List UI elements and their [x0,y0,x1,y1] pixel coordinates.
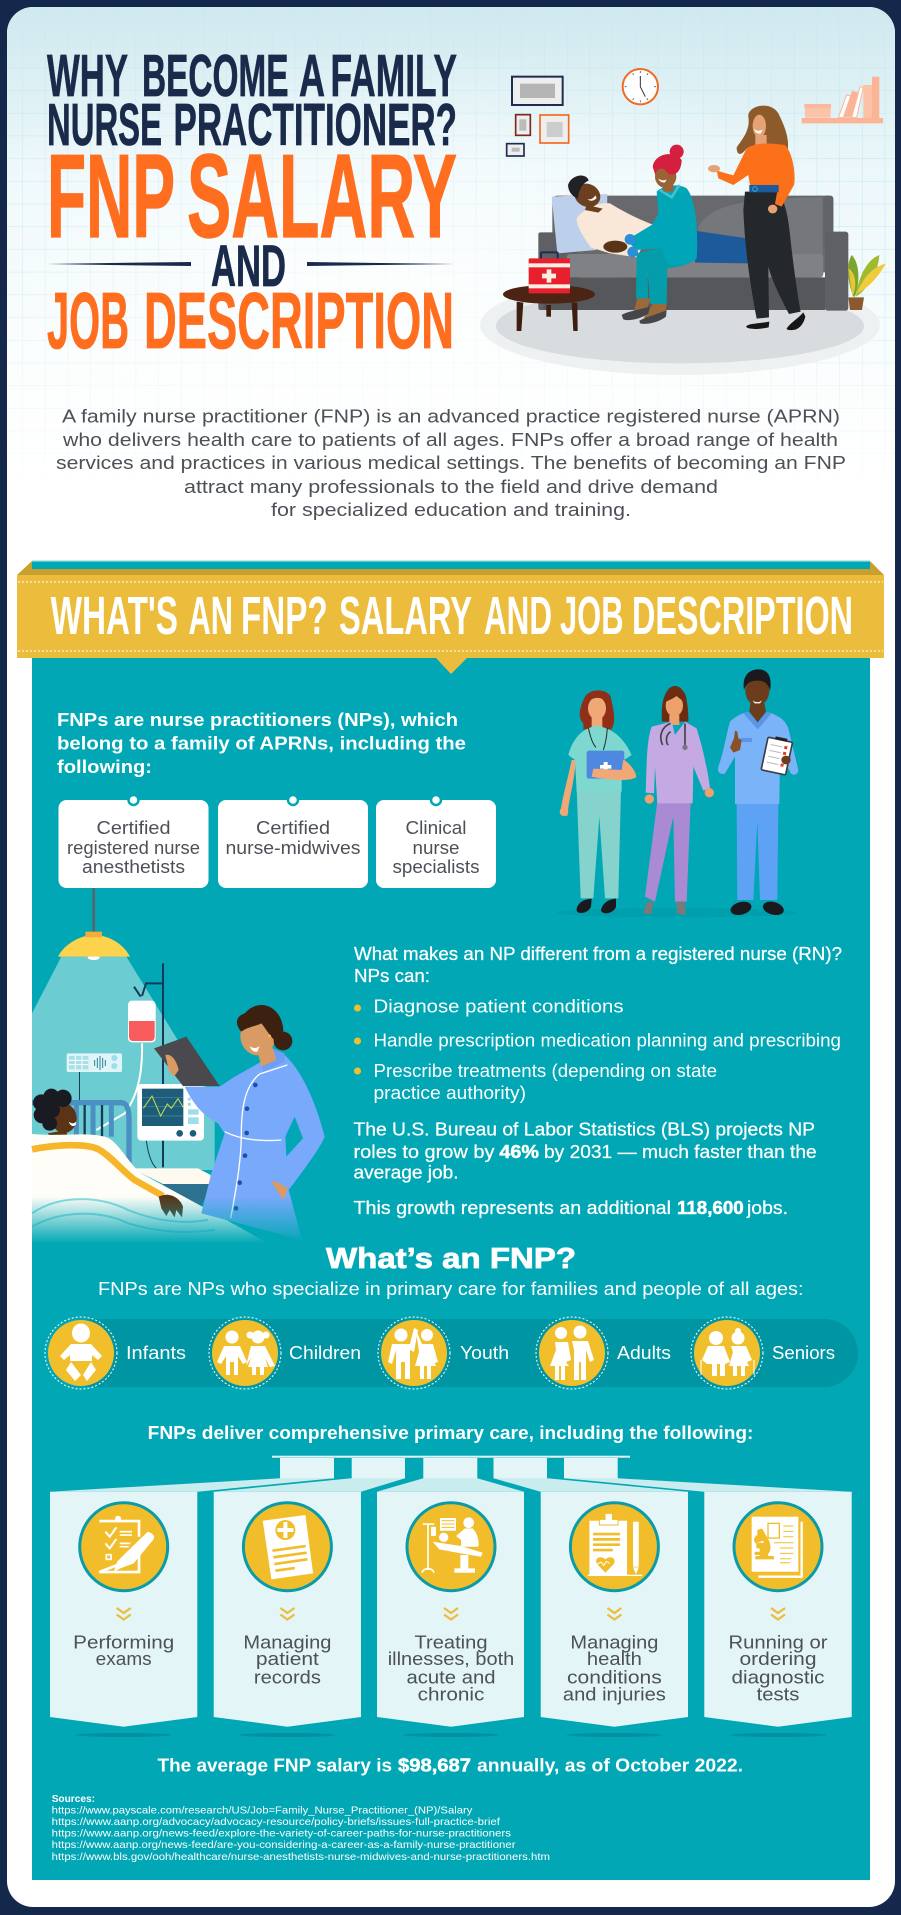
intro paragraph [56,406,846,520]
icon: chevrons [771,1608,785,1620]
bullet list: Diagnose patient conditions [374,996,624,1016]
card: managing health conditions: conditions [567,1666,662,1687]
card: clinical specialists: nurse [412,838,460,858]
salary statement [158,1756,743,1776]
age group: children [209,1317,361,1389]
APRN intro text: belong to a family of APRNs, including the [57,734,466,754]
banner heading [17,561,884,674]
age group: youth: Youth [460,1343,509,1363]
patient in bed [32,1089,268,1260]
IV stand and bag [96,963,164,1167]
card: clinical specialists: Clinical [406,818,466,838]
banner heading: SALARY [339,586,472,646]
floor rug [480,275,880,375]
card: nurse-midwives: nurse-midwives [226,838,360,858]
icon: patient treatment [407,1503,495,1591]
illustration: three nurses [557,669,798,917]
sources: https://www.aanp.org/news-feed/are-you-considering-a-career-as-a-family-nurse-practitioner [52,1839,516,1851]
card: nurse anesthetists: registered nurse [67,838,200,858]
pillow [552,194,607,253]
growth statistics: 46% [499,1142,539,1162]
card: performing exams [50,1492,197,1737]
title: NURSE [47,92,162,158]
sources: Sources: [52,1793,95,1805]
age group: youth [378,1317,509,1389]
card: running diagnostic tests [704,1492,852,1737]
icon: clipboard and pen [80,1503,168,1591]
card: running diagnostic tests: Running or [728,1631,828,1652]
light beam [32,957,215,1170]
heading: What's an FNP? [98,1243,804,1299]
card: running diagnostic tests: tests [757,1684,799,1705]
card: performing exams: exams [96,1648,152,1669]
card: nurse anesthetists: Certified [96,818,170,838]
heading: What's an FNP?: FNPs are NPs who specialize in primary care for families and people of all ages: [98,1279,804,1299]
nurse seated [622,145,697,324]
growth statistics: roles to grow by [354,1142,494,1162]
banner heading: AND [484,586,552,646]
question [354,944,842,986]
age group: adults: Adults [617,1343,671,1363]
growth statistics: 118,600 [677,1198,744,1218]
nurse with tablet [154,1005,325,1240]
bullet list [354,996,841,1103]
icon: chevrons [117,1608,131,1620]
potted plant [848,255,886,310]
age group: adults [536,1317,671,1389]
bottom fade [32,1197,312,1243]
title: PRACTITIONER? [174,92,457,158]
card: managing health conditions: and injuries [563,1684,666,1705]
banner heading: WHAT'S [51,586,178,646]
sofa [538,196,848,311]
question: What makes an NP different from a registered nurse (RN)? [354,944,842,964]
wall frames [507,77,569,156]
nurse in lavender scrubs [643,686,714,915]
APRN type cards [58,795,496,888]
card: managing patient records [214,1492,361,1737]
title: FAMILY [330,43,457,109]
bedside table [131,1168,211,1207]
card: clinical specialists [376,795,496,888]
age group: infants [45,1317,186,1389]
card: running diagnostic tests: diagnostic [732,1666,824,1687]
primary care heading: FNPs deliver comprehensive primary care, including the following: [148,1423,753,1443]
growth statistics: by 2031 — much faster than the [544,1142,817,1162]
header background with grid [7,7,895,500]
growth statistics: average job. [354,1163,458,1183]
intro paragraph: for specialized education and training. [271,499,631,520]
icon: chevrons [444,1608,458,1620]
growth statistics [354,1120,817,1218]
ceiling lamp [58,888,130,960]
bookshelf [802,77,883,123]
card: managing health conditions: health [587,1648,642,1669]
RN comparison text [354,944,842,1218]
first aid kit [529,252,570,293]
card: clinical specialists: specialists [392,857,480,877]
intro paragraph: A family nurse practitioner (FNP) is an advanced practice registered nurse (APRN) [62,406,840,426]
card: performing exams: Performing [73,1631,174,1652]
age group: seniors: Seniors [772,1343,835,1363]
coffee table [503,285,595,331]
growth statistics: The U.S. Bureau of Labor Statistics (BLS) projects NP [354,1120,815,1140]
banner heading: JOB [560,586,624,646]
sources: https://www.aanp.org/news-feed/explore-the-variety-of-career-paths-for-nurse-practitioners [52,1828,511,1840]
title [47,43,457,365]
title: WHY [47,43,128,109]
title: BECOME [142,43,288,109]
card: managing health conditions: Managing [570,1631,658,1652]
card: treating illnesses: chronic [418,1684,484,1705]
icon: health chart and pencil [570,1503,658,1591]
sources: https://www.payscale.com/research/US/Job=Family_Nurse_Practitioner_(NP)/Salary [52,1804,473,1816]
age groups row [45,1317,858,1389]
connector bar and tabs [50,1456,852,1492]
card: managing patient records: Managing [243,1631,331,1652]
patient [568,176,749,263]
icon: medical record [243,1503,331,1591]
intro paragraph: who delivers health care to patients of all ages. FNPs offer a broad range of health [62,429,838,450]
salary statement: annually, as of October 2022. [477,1756,743,1776]
card: running diagnostic tests: ordering [740,1648,816,1669]
title: JOB [47,276,129,365]
card: treating illnesses: acute and [406,1666,496,1687]
nurse in mint scrubs [560,690,636,913]
salary statement: $98,687 [398,1756,471,1776]
card: treating illnesses [377,1492,524,1737]
card: treating illnesses: Treating [414,1631,488,1652]
card: nurse-midwives [218,795,368,888]
banner heading: FNP? [241,586,328,646]
standing woman [708,106,805,330]
intro paragraph: services and practices in various medical settings. The benefits of becoming an FNP [56,452,846,473]
APRN intro text: following: [57,757,152,777]
bullet list: Handle prescription medication planning and prescribing [374,1030,841,1050]
icon: microscope report [734,1503,822,1591]
title: SALARY [187,130,457,263]
title: DESCRIPTION [144,276,454,365]
APRN intro text [57,710,466,777]
illustration: nurse at hospital bedside [32,888,325,1260]
icon: chevrons [280,1608,294,1620]
clock [623,69,658,104]
wall device [67,1053,122,1102]
card: nurse anesthetists: anesthetists [82,857,185,877]
salary statement: The average FNP salary is [158,1756,392,1776]
title: AND [211,234,286,299]
heart monitor [137,1084,204,1168]
bullet list: Prescribe treatments (depending on state [374,1061,717,1081]
title: FNP [47,130,175,263]
bed rail [32,1103,129,1167]
sources: https://www.bls.gov/ooh/healthcare/nurse-anesthetists-nurse-midwives-and-nurse-practitioners.htm [52,1851,550,1863]
panel: teal main section [32,560,870,1880]
question: NPs can: [354,966,430,986]
age group: children: Children [289,1343,361,1363]
title: A [299,43,325,109]
card: treating illnesses: illnesses, both [388,1648,514,1669]
sources [52,1793,550,1863]
age group: seniors [691,1317,835,1389]
icon: chevrons [607,1608,621,1620]
card: managing patient records: records [254,1666,321,1687]
card: nurse anesthetists [58,795,208,888]
banner heading: AN [188,586,233,646]
card: managing patient records: patient [256,1648,319,1669]
heading: What's an FNP?: What’s an FNP? [326,1243,576,1275]
card: nurse-midwives: Certified [256,818,330,838]
bullet list: practice authority) [374,1083,526,1103]
age group: infants: Infants [126,1343,186,1363]
sources: https://www.aanp.org/advocacy/advocacy-resource/policy-briefs/issues-full-practice-brief [52,1816,500,1828]
APRN intro text: FNPs are nurse practitioners (NPs), which [57,710,458,730]
growth statistics: This growth represents an additional [354,1198,671,1218]
growth statistics: jobs. [746,1198,788,1218]
card: managing health conditions [541,1492,688,1737]
intro paragraph: attract many professionals to the field and drive demand [184,476,718,497]
nurse in blue scrubs with clipboard [718,669,798,917]
illustration: patient care in living room [480,69,886,375]
